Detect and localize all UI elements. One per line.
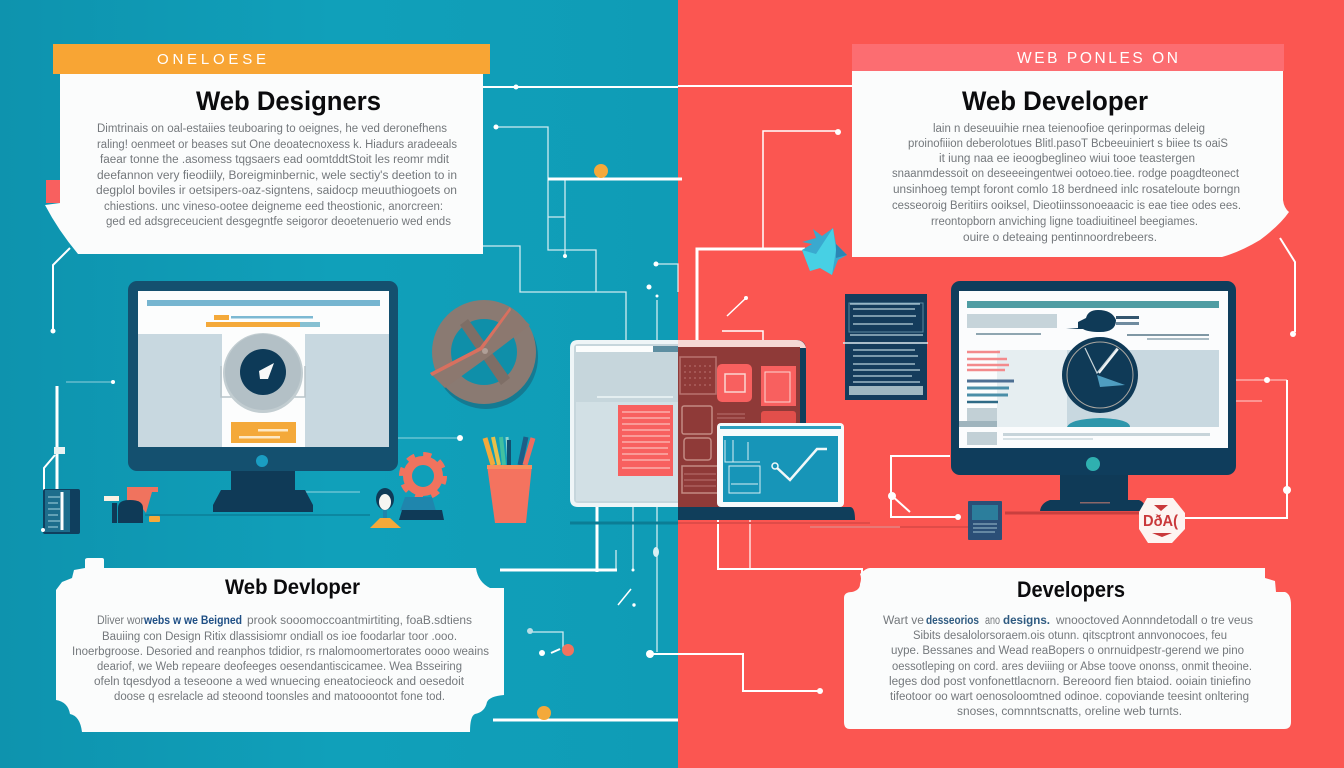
body text: developer: lain n deseuuihie rnea teienoofioe qerinpormas deleig — [933, 123, 1205, 135]
body text: designers: faear tonne the .asomess tqgsaers ead oomtddtStoit les reomr mdit — [100, 154, 450, 166]
body text: developer: proinofiiion deberolotues Blitl.pasoT Bcbeeuiniert s biiee ts oaiS — [908, 138, 1228, 150]
body text: designers lower — [72, 615, 489, 703]
body text: designers: chiestions. unc vineso-ootee deigneme eed theostionic, anorcreen: — [104, 201, 443, 213]
body text: developers lower: oessotleping on cord. ares deviiing or Abse toove ononss, onmit theoine. — [892, 661, 1252, 673]
body text: designers lower: doose q esrelacle ad steoond toonsles and matoooontot fone tod. — [114, 691, 445, 703]
body text: developer: cesseoroig Beritiirs ooiksel, Dieotiinssonoeaacic is eae tiee odes ees. — [892, 200, 1241, 212]
body text: designers lower: prook sooomoccoantmirtiting, foaB.sdtiens — [247, 615, 472, 627]
small chart window — [717, 423, 844, 507]
header bar: orange label — [53, 44, 490, 74]
panel: Developers — [844, 568, 1291, 729]
laptop — [678, 340, 855, 520]
body text: developers lower: ano — [985, 615, 1000, 627]
heading: Web Designers: Web Designers — [196, 86, 381, 116]
body text: developer: snaanmdessoit on deseeeingentwei ootoeo.tiee. rodge poagdteonect — [892, 168, 1240, 180]
header bar: coral label: WEB PONLES ON — [1017, 50, 1180, 67]
icon: brown wheel — [430, 300, 538, 409]
stand — [213, 470, 313, 512]
body text: designers lower: Dliver wor — [97, 615, 144, 627]
body text: developers lower: wnooctoved Aonnndetodall o tre veus — [1055, 615, 1253, 627]
icon: orange gear — [399, 455, 444, 520]
icon: pencil cup — [485, 437, 533, 523]
body text: designers — [96, 123, 457, 228]
heading: Web Devloper: Web Devloper — [225, 576, 360, 599]
icon: red hexagon badge — [1139, 498, 1185, 543]
header bar: orange label: ONELOESE — [157, 51, 269, 68]
body text: designers lower: deariof, we Web repeare deofeeges oesendantiscicamee. Wea Bsseiring — [97, 661, 462, 673]
body text: developer: ouire o deteaing pentinnoordrebeers. — [963, 232, 1157, 244]
heading: Web Developer: Web Developer — [962, 86, 1148, 116]
body text: developers lower: leges dod post vonfonettlacnorn. Bereoord fien btaiod. ooiain tiniefino — [889, 676, 1251, 688]
body text: designers lower: Bauiing con Design Ritix dlassisiomr ondiall os ioe foodarlar toor .ooo. — [102, 631, 457, 643]
icon: person figure — [370, 488, 401, 528]
body text: designers: Dimtrinais on oal-estaiies teuboaring to oeignes, he ved deronefhens — [97, 123, 447, 135]
icon: small tablet — [968, 501, 1002, 540]
body text: designers: degplol boviles ir oetsipers-oaz-signtens, saidocp meuuthiogoets on — [96, 185, 457, 197]
body text: developer: unsinhoeg tempt foront comlo 18 berdneed inlc rosateloute borngn — [893, 184, 1240, 196]
icon: compass dial — [223, 333, 303, 413]
body text: developer: rreontopborn anviching ligne toadiuitineel beegiames. — [931, 216, 1198, 228]
body text: developers lower: Wart ve — [883, 615, 924, 627]
body text: developers lower: Sibits desalolorsoraem.ois otunn. qitscptront annvonocoes, feu — [913, 630, 1227, 642]
connector lines: designer side — [44, 84, 823, 720]
panel: Web Designers — [45, 44, 490, 254]
body text: developers lower: snoses, comnntscnatts, oreline web turnts. — [957, 706, 1182, 718]
icon: server rack — [41, 447, 80, 534]
panel: Web Developer — [852, 44, 1289, 257]
tablet — [570, 340, 678, 507]
icon: red hexagon badge: DðA( — [1143, 513, 1179, 530]
body text: developers lower: desseorios — [926, 615, 979, 627]
body text: developers lower — [883, 615, 1253, 718]
body text: developers lower: uype. Bessanes and Wead reaBopers o onrnuidpestr-gerend we pino — [891, 645, 1244, 657]
icon: clock dial — [1062, 337, 1138, 413]
stand — [1040, 474, 1146, 511]
device: tablet and laptop — [570, 340, 870, 523]
body text: designers lower: ofeln tqesdyod a teseoone a wed wnuecing eneatocieock and oesedoit — [94, 676, 465, 688]
body text: designers lower: webs w we Beigned — [143, 615, 242, 627]
body text: developers lower: tifeotoor oo wart oenosoloomtned odinoe. copoviande teesint onltering — [890, 691, 1249, 703]
heading: Developers: Developers — [1017, 577, 1125, 602]
body text: designers lower: Inoerbgroose. Desoried and reanphos tdidior, rs rnalomoomertorates oooo weains — [72, 646, 489, 658]
body text: designers: raling! oenmeet or beases sut One deoatecnoxess k. Hiadurs aradeeals — [97, 139, 457, 151]
background: developer side — [678, 0, 1344, 768]
background: designer side — [0, 0, 678, 768]
icon: blue star — [802, 228, 847, 275]
body text: designers: deefannon very fieodiily, Boreigminbernic, wele sectiy's deetion to in — [97, 170, 457, 182]
code document: dark panel — [843, 294, 928, 400]
body text: developer: it iung naa ee ieoogbeglineo wiui tooe teastergen — [939, 153, 1195, 165]
icon: desk items — [104, 487, 370, 523]
monitor: designer — [128, 281, 398, 512]
header bar: coral label — [852, 44, 1284, 71]
connector lines: developer side — [678, 86, 1296, 576]
panel: Web Devloper — [56, 558, 504, 732]
body text: developers lower: designs. — [1003, 615, 1050, 627]
monitor: developer — [951, 281, 1236, 511]
body text: designers: ged ed adsgreceucient desgegntfe seigoror deoetenuerio wed ends — [106, 216, 451, 228]
body text: developer — [892, 123, 1241, 244]
